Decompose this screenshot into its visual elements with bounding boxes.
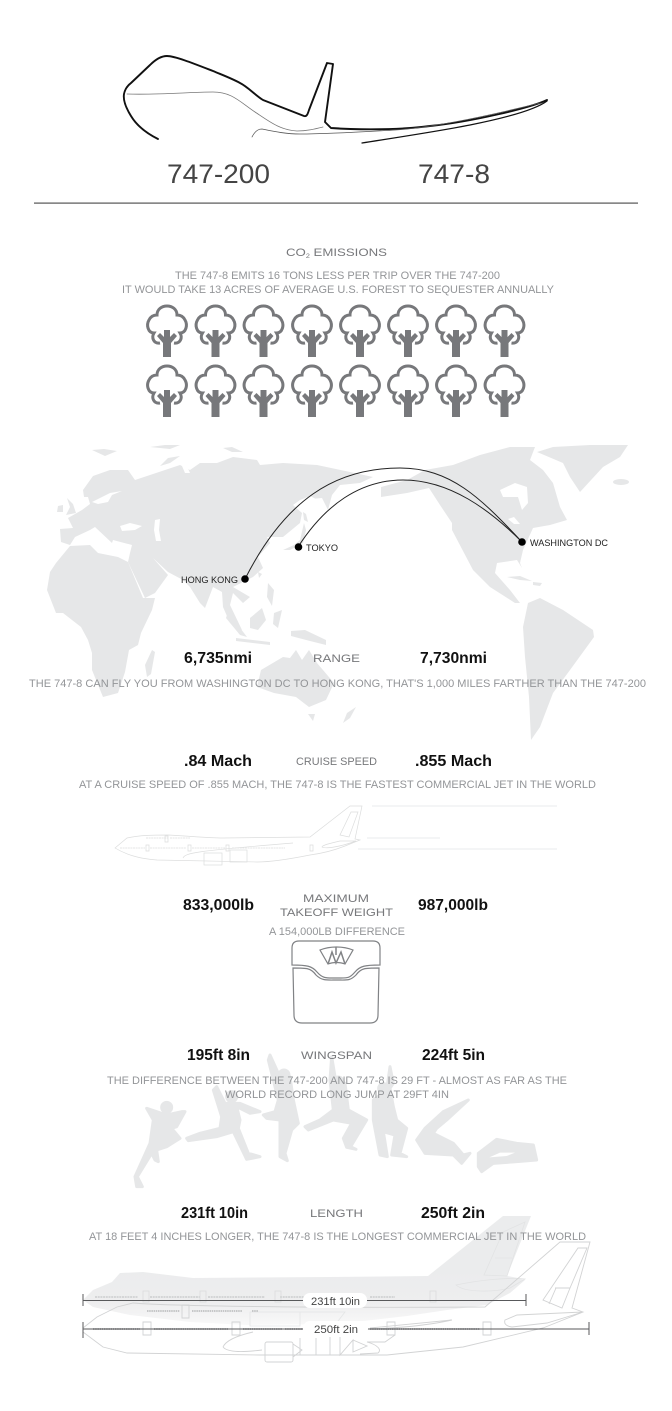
heading: cruise speed: CRUISE SPEED [296, 756, 377, 768]
value: 747-8 weight: 987,000lb [418, 897, 488, 914]
icon: long jump silhouettes [135, 1055, 537, 1187]
header: tail comparison [124, 56, 547, 189]
city: Washington DC: WASHINGTON DC [530, 538, 608, 548]
arc: Hong Kong to Washington DC [245, 468, 522, 579]
value: 747-200 wingspan: 195ft 8in [187, 1047, 250, 1064]
label: 747-8: 747-8 [418, 159, 490, 189]
heading: maximum takeoff weight: TAKEOFF WEIGHT [280, 907, 393, 919]
icon: overlaid tail and fuselage silhouettes [124, 56, 547, 143]
text block: emissions description: IT WOULD TAKE 13 ACRES OF AVERAGE U.S. FOREST TO SEQUESTER ANNUALLY [122, 284, 555, 296]
text block: range description: THE 747-8 CAN FLY YOU FROM WASHINGTON DC TO HONG KONG, THAT'S 1,000 MILES FARTHER THAN THE 747-200 [29, 678, 646, 690]
illustration: 747-200 side view [83, 1216, 531, 1326]
text block: emissions description [122, 270, 555, 296]
panel: cruise speed [79, 753, 596, 865]
dimension: 231ft 10in: 231ft 10in [311, 1296, 360, 1308]
heading: wingspan: WINGSPAN [301, 1050, 372, 1062]
city: Hong Kong: HONG KONG [181, 575, 238, 585]
heading: maximum takeoff weight: MAXIMUM [303, 893, 369, 905]
value: 747-200 speed: .84 Mach [184, 753, 252, 770]
text block: wingspan description: THE DIFFERENCE BETWEEN THE 747-200 AND 747-8 IS 29 FT - ALMOST AS FAR AS THE [107, 1075, 567, 1087]
value: 747-8 speed: .855 Mach [415, 753, 492, 770]
world map [47, 445, 629, 740]
panel: wingspan [107, 1047, 567, 1187]
heading: length: LENGTH [310, 1208, 363, 1220]
map: flight routes [181, 468, 608, 585]
label: 747-200: 747-200 [167, 159, 270, 189]
text block: emissions description: THE 747-8 EMITS 16 TONS LESS PER TRIP OVER THE 747-200 [175, 270, 500, 282]
text block: speed description: AT A CRUISE SPEED OF .855 MACH, THE 747-8 IS THE FASTEST COMMERCIAL JET IN THE WORLD [79, 779, 596, 791]
panel: maximum takeoff weight [183, 893, 488, 1023]
value: 747-8 length: 250ft 2in [421, 1205, 485, 1222]
white inland seas [92, 464, 528, 541]
city: Tokyo: TOKYO [306, 543, 338, 553]
value: 747-200 length: 231ft 10in [181, 1205, 248, 1222]
panel: CO2 emissions [122, 247, 555, 417]
heading: CO2 emissions: EMISSIONS [310, 247, 387, 259]
value: 747-8 wingspan: 224ft 5in [422, 1047, 485, 1064]
text block: wingspan description [107, 1075, 567, 1101]
dimension: 250ft 2in: 250ft 2in [314, 1324, 358, 1336]
dimension: 250ft 2in [83, 1321, 589, 1338]
panel: length [83, 1205, 590, 1362]
heading: maximum takeoff weight [280, 893, 393, 919]
dimension: 231ft 10in [83, 1293, 526, 1308]
heading: CO2 emissions: 2 [306, 254, 311, 260]
icon: plane with speed lines [115, 806, 557, 865]
text block: length description: AT 18 FEET 4 INCHES LONGER, THE 747-8 IS THE LONGEST COMMERCIAL JET IN THE WORLD [89, 1231, 586, 1243]
value: 747-200 range: 6,735nmi [184, 650, 252, 667]
icon: weighing scale [292, 941, 380, 1023]
value: 747-8 range: 7,730nmi [420, 650, 487, 667]
text block: weight difference: A 154,000LB DIFFERENCE [269, 926, 405, 938]
text block: wingspan description: WORLD RECORD LONG JUMP AT 29FT 4IN [225, 1089, 449, 1101]
arc: Tokyo to Washington DC [298, 480, 522, 547]
panel: range [29, 650, 646, 690]
illustration: 747-8 side view [83, 1242, 590, 1362]
heading: range: RANGE [313, 653, 360, 665]
icon row: trees [148, 306, 524, 417]
heading: CO2 emissions: CO [286, 247, 302, 259]
value: 747-200 weight: 833,000lb [183, 897, 254, 914]
